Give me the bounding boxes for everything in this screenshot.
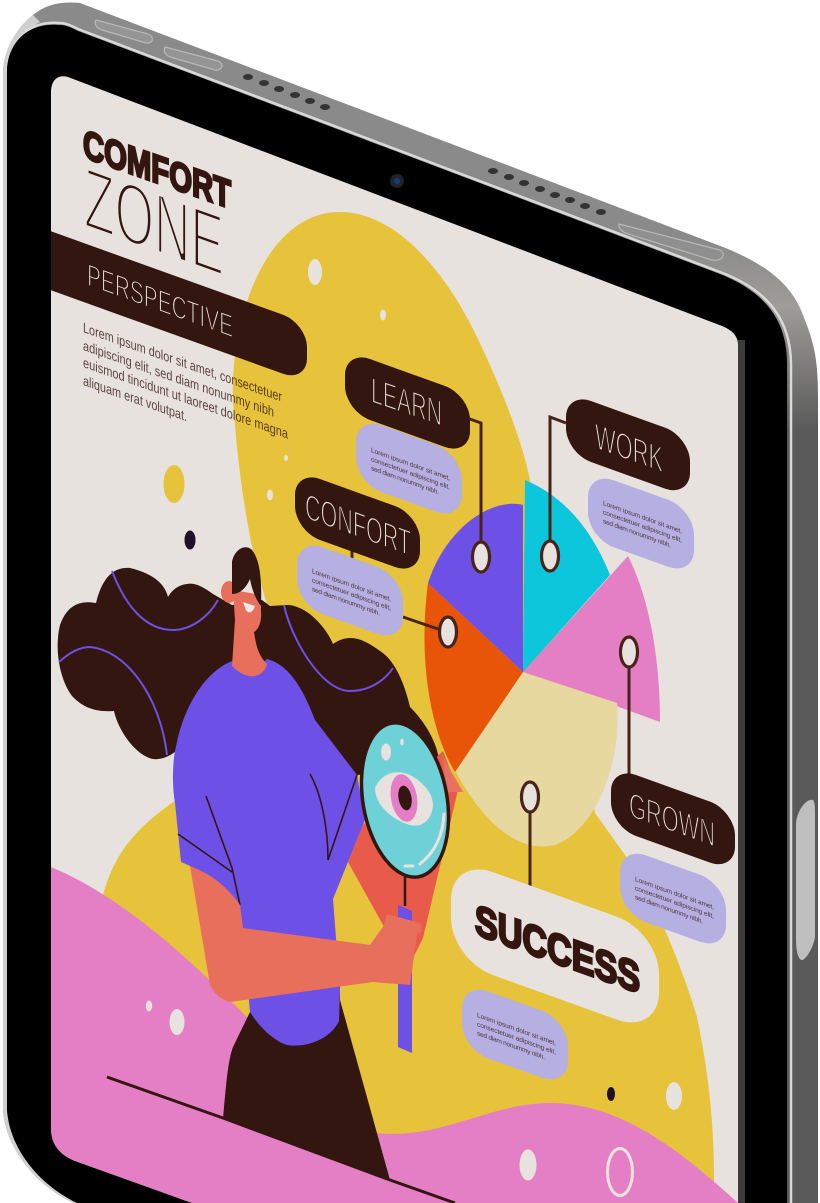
intro paragraph: Lorem ipsum dolor sit amet, consectetuer bbox=[83, 320, 282, 406]
hair highlights bbox=[59, 571, 393, 755]
bubble: work: sed diam nonummy nibh. bbox=[603, 518, 671, 549]
label: work bbox=[566, 399, 690, 490]
top buttons bbox=[95, 20, 723, 260]
intro paragraph: aliquam erat volutpat. bbox=[83, 373, 187, 425]
arm bbox=[190, 866, 422, 1002]
hair bbox=[58, 568, 440, 775]
perspective banner bbox=[51, 231, 307, 376]
bubble: work: consectetuer adipiscing elit, bbox=[603, 509, 682, 544]
pink foreground wave bbox=[51, 867, 738, 1203]
shirt bbox=[173, 659, 365, 1046]
bubble: work bbox=[588, 478, 694, 568]
title bbox=[83, 131, 232, 274]
woman bbox=[58, 547, 440, 1180]
neck and face bbox=[232, 590, 267, 676]
bubble: grown: sed diam nonummy nibh. bbox=[635, 894, 703, 925]
shirt folds bbox=[178, 774, 357, 905]
label: grown bbox=[611, 773, 735, 864]
eye bbox=[375, 772, 433, 826]
speaker holes bbox=[243, 74, 606, 215]
title: ZONE bbox=[84, 148, 224, 295]
perspective banner: PERSPECTIVE bbox=[87, 257, 233, 344]
bubble: success bbox=[462, 990, 568, 1080]
handle bbox=[404, 877, 406, 906]
foreground dots bbox=[146, 1000, 633, 1196]
bubble: learn: consectetuer adipiscing elit, bbox=[371, 456, 450, 491]
smile bbox=[243, 602, 255, 612]
yellow blob bbox=[103, 212, 714, 1203]
bubble: success: Lorem ipsum dolor sit amet, bbox=[477, 1012, 556, 1047]
bubble: confort bbox=[297, 546, 403, 636]
hand over handle bbox=[370, 914, 422, 985]
ear bbox=[221, 581, 234, 603]
screen edge strip bbox=[738, 340, 745, 1203]
bubble: confort: consectetuer adipiscing elit, bbox=[312, 577, 391, 612]
connectors bbox=[352, 417, 629, 888]
bubble: success: sed diam nonummy nibh. bbox=[477, 1030, 545, 1061]
red arrow shape bbox=[348, 751, 463, 958]
lens highlights bbox=[381, 744, 391, 760]
magnifier bbox=[360, 724, 450, 1053]
label: success: SUCCESS bbox=[475, 896, 640, 1003]
title: COMFORT bbox=[83, 121, 231, 218]
bubble: learn bbox=[356, 424, 462, 514]
label: confort bbox=[295, 477, 420, 569]
camera bbox=[390, 174, 404, 188]
side button bbox=[796, 800, 815, 960]
intro paragraph: euismod tincidunt ut laoreet dolore magna bbox=[83, 355, 289, 443]
label: learn: LEARN bbox=[371, 369, 442, 434]
bubble: confort: sed diam nonummy nibh. bbox=[312, 586, 380, 617]
bubble: learn: Lorem ipsum dolor sit amet, bbox=[371, 447, 450, 482]
pie chart bbox=[424, 480, 660, 847]
intro paragraph: adipiscing elit, sed diam nonummy nibh bbox=[83, 338, 274, 421]
trousers bbox=[223, 985, 390, 1180]
head hair bbox=[232, 547, 261, 606]
connector rings bbox=[440, 541, 638, 812]
label: work: WORK bbox=[595, 415, 663, 480]
lens bbox=[360, 724, 450, 879]
ground line bbox=[107, 1077, 455, 1203]
bubble: grown bbox=[620, 854, 726, 944]
bubble: grown: Lorem ipsum dolor sit amet, bbox=[635, 876, 714, 911]
label: grown: GROWN bbox=[629, 784, 715, 855]
bubble: work: Lorem ipsum dolor sit amet, bbox=[603, 500, 682, 535]
bubble: success: consectetuer adipiscing elit, bbox=[477, 1021, 556, 1056]
label: success bbox=[451, 870, 659, 1022]
decorative dots bbox=[164, 259, 682, 1110]
label: learn bbox=[345, 357, 470, 449]
bubble: grown: consectetuer adipiscing elit, bbox=[635, 885, 714, 920]
label: confort: CONFORT bbox=[305, 485, 411, 564]
bubble: confort: Lorem ipsum dolor sit amet, bbox=[312, 568, 391, 603]
bubble: learn: sed diam nonummy nibh. bbox=[371, 465, 439, 496]
